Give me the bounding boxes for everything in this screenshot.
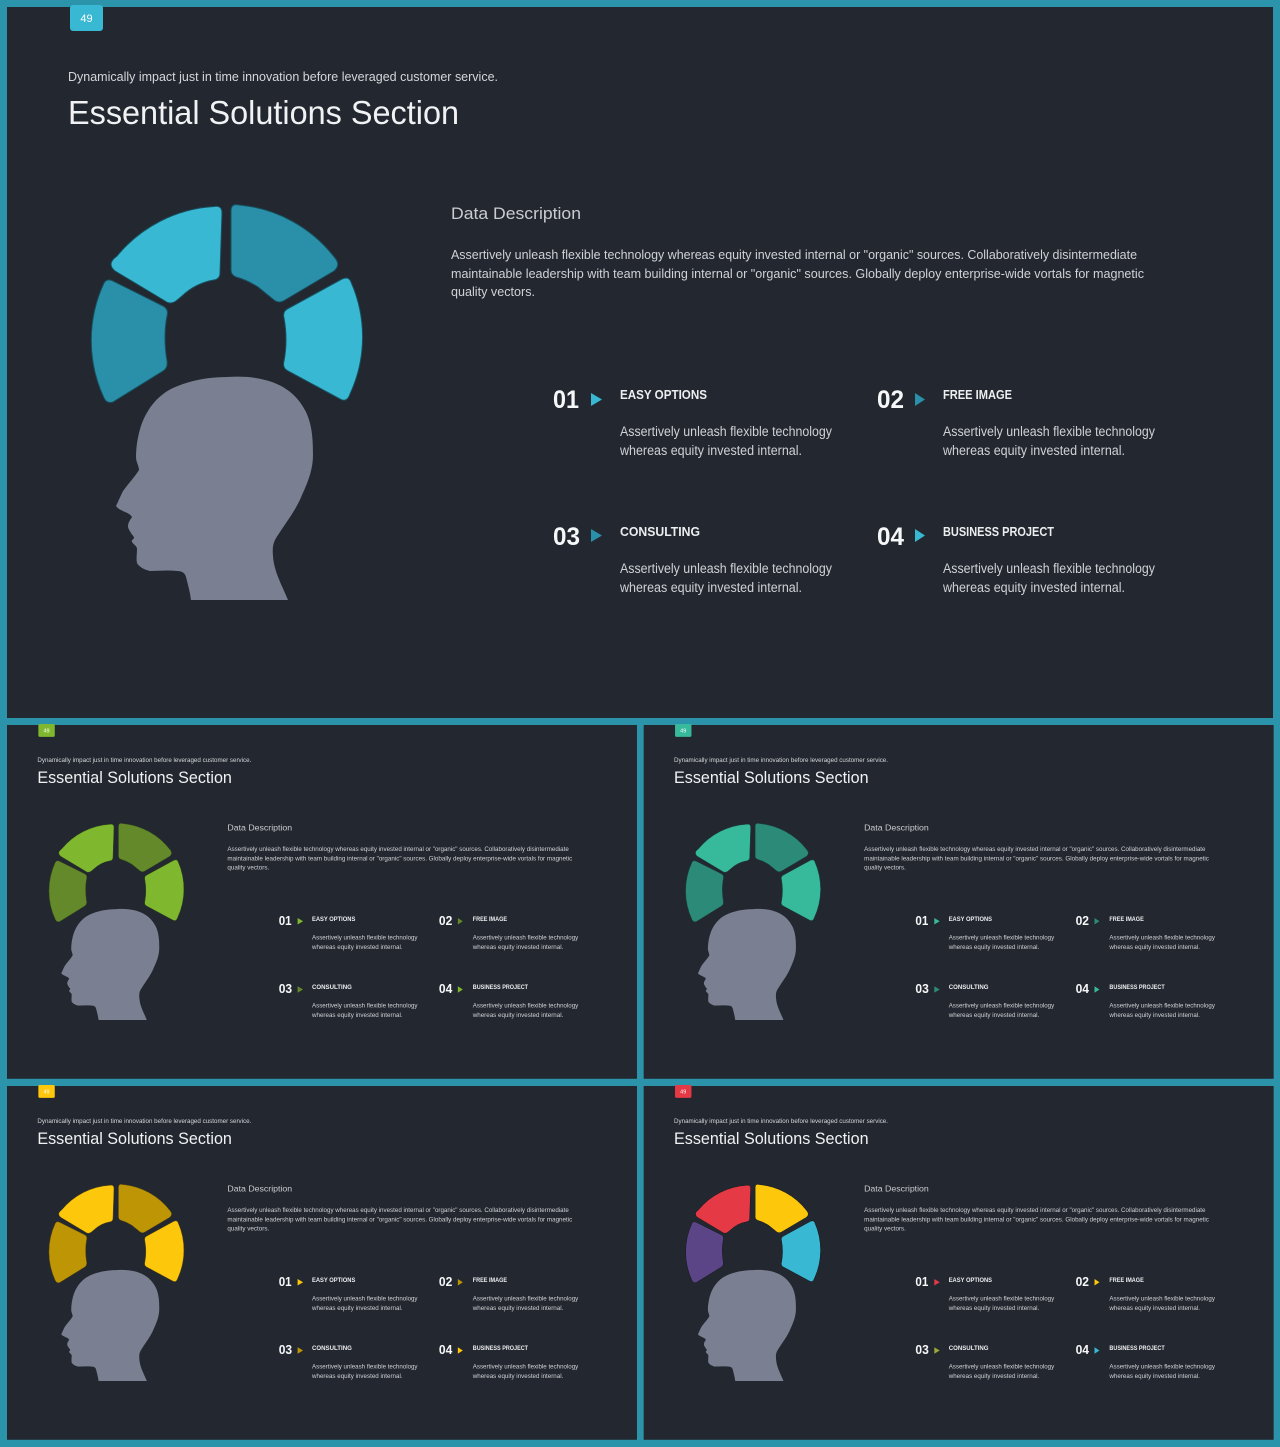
item 04: BUSINESS PROJECT: [473, 984, 528, 991]
subtitle: Dynamically impact just in time innovation before leveraged customer service.: [68, 69, 498, 84]
item 03: Assertively unleash flexible technology: [949, 1003, 1055, 1010]
item 03: 03: [553, 523, 580, 551]
item 03: whereas equity invested internal.: [948, 1373, 1039, 1380]
item 01: EASY OPTIONS: [949, 1277, 993, 1284]
item 01: 01: [279, 914, 292, 928]
text block: description: quality vectors.: [227, 1225, 269, 1232]
item 04: BUSINESS PROJECT: [943, 524, 1054, 539]
item 01: EASY OPTIONS: [949, 916, 993, 923]
item 02: [877, 386, 1155, 458]
text block: description: maintainable leadership with team building internal or "organic" sources. Globally deploy enterprise-wide vortals for magnetic: [864, 855, 1210, 862]
item 04: whereas equity invested internal.: [1109, 1373, 1200, 1380]
item 04: BUSINESS PROJECT: [1109, 1345, 1165, 1352]
item 01: Assertively unleash flexible technology: [312, 934, 418, 941]
title: Essential Solutions Section: [674, 769, 869, 787]
badge: page number: 49: [80, 13, 93, 25]
item 02: Assertively unleash flexible technology: [473, 1295, 579, 1302]
item 03: 03: [279, 1343, 292, 1357]
item 03: Assertively unleash flexible technology: [312, 1364, 418, 1371]
badge: page number: [675, 724, 691, 737]
item 04: Assertively unleash flexible technology: [473, 1003, 579, 1010]
item 04: 04: [439, 1343, 452, 1357]
heading: data description: Data Description: [227, 1183, 292, 1193]
item 02: 02: [1076, 914, 1089, 928]
badge: page number: 49: [44, 1089, 50, 1095]
item 01: whereas equity invested internal.: [948, 944, 1039, 951]
badge: page number: 49: [44, 728, 50, 734]
item 01: 01: [279, 1275, 292, 1289]
item 03: CONSULTING: [312, 1345, 352, 1352]
title: Essential Solutions Section: [68, 94, 459, 131]
item 04: BUSINESS PROJECT: [1109, 984, 1165, 991]
text block: description: [864, 846, 1210, 871]
item 02: whereas equity invested internal.: [1109, 944, 1200, 951]
item 01: whereas equity invested internal.: [948, 1305, 1039, 1312]
item 01: EASY OPTIONS: [620, 387, 707, 402]
item 01: Assertively unleash flexible technology: [949, 1295, 1055, 1302]
item 03: Assertively unleash flexible technology: [312, 1003, 418, 1010]
item 04: Assertively unleash flexible technology: [1109, 1003, 1216, 1010]
item 02: whereas equity invested internal.: [472, 1305, 563, 1312]
item 03: [553, 523, 832, 595]
item 04: [1076, 1343, 1216, 1380]
panel: green-teal slide: [644, 724, 1274, 1079]
icon: head with four segments: [49, 1184, 184, 1381]
text block: description: [451, 247, 1144, 299]
item 03: whereas equity invested internal.: [948, 1012, 1039, 1019]
item 03: CONSULTING: [620, 524, 700, 539]
icon: head with four segments: [686, 823, 821, 1020]
item 03: CONSULTING: [312, 984, 352, 991]
item 01: Assertively unleash flexible technology: [620, 424, 832, 439]
item 02: FREE IMAGE: [943, 387, 1012, 402]
item 02: FREE IMAGE: [1109, 916, 1144, 923]
item 02: Assertively unleash flexible technology: [1109, 934, 1216, 941]
item 03: [279, 1343, 418, 1380]
text block: description: maintainable leadership with team building internal or "organic" sources. Globally deploy enterprise-wide vortals for magnetic: [451, 266, 1144, 281]
text block: description: quality vectors.: [864, 1225, 906, 1232]
text block: description: [227, 1207, 573, 1232]
item 01: [279, 914, 418, 951]
item 02: [439, 914, 579, 951]
subtitle: Dynamically impact just in time innovation before leveraged customer service.: [674, 757, 888, 764]
item 04: Assertively unleash flexible technology: [1109, 1364, 1216, 1371]
item 01: EASY OPTIONS: [312, 916, 356, 923]
panel: main teal slide: [7, 5, 1273, 718]
text block: description: Assertively unleash flexible technology whereas equity invested internal or "organic" sources. Collaboratively disintermediate: [864, 1207, 1206, 1214]
heading: data description: Data Description: [451, 204, 581, 223]
item 01: EASY OPTIONS: [312, 1277, 356, 1284]
icon: head with four segments: [91, 205, 363, 600]
item 04: Assertively unleash flexible technology: [473, 1364, 579, 1371]
item 04: Assertively unleash flexible technology: [943, 561, 1155, 576]
title: Essential Solutions Section: [674, 1130, 869, 1148]
badge: page number: [38, 1085, 55, 1098]
item 02: 02: [439, 914, 452, 928]
item 01: [553, 386, 832, 458]
text block: description: Assertively unleash flexible technology whereas equity invested internal or "organic" sources. Collaboratively disintermediate: [451, 247, 1137, 262]
icon: head with four segments: [686, 1184, 821, 1381]
item 03: 03: [279, 982, 292, 996]
item 04: BUSINESS PROJECT: [473, 1345, 528, 1352]
item 02: [1076, 1275, 1216, 1312]
item 02: 02: [439, 1275, 452, 1289]
item 02: Assertively unleash flexible technology: [1109, 1295, 1216, 1302]
item 02: Assertively unleash flexible technology: [943, 424, 1155, 439]
panel: yellow slide: [7, 1085, 637, 1440]
badge: page number: [675, 1085, 691, 1098]
item 01: whereas equity invested internal.: [311, 944, 403, 951]
badge: page number: 49: [680, 1089, 686, 1095]
badge: page number: [38, 724, 55, 737]
text block: description: Assertively unleash flexible technology whereas equity invested internal or "organic" sources. Collaboratively disintermediate: [227, 846, 569, 853]
item 04: 04: [877, 523, 904, 551]
text block: description: Assertively unleash flexible technology whereas equity invested internal or "organic" sources. Collaboratively disintermediate: [227, 1207, 569, 1214]
panel: multicolour slide: [644, 1085, 1274, 1440]
title: Essential Solutions Section: [37, 1130, 232, 1148]
text block: description: maintainable leadership with team building internal or "organic" sources. Globally deploy enterprise-wide vortals for magnetic: [227, 1216, 573, 1223]
item 04: [877, 523, 1155, 595]
subtitle: Dynamically impact just in time innovation before leveraged customer service.: [674, 1118, 888, 1125]
subtitle: Dynamically impact just in time innovation before leveraged customer service.: [37, 1118, 252, 1125]
item 03: Assertively unleash flexible technology: [949, 1364, 1055, 1371]
item 03: 03: [915, 1343, 929, 1357]
text block: description: quality vectors.: [451, 284, 535, 299]
item 02: whereas equity invested internal.: [942, 443, 1125, 458]
item 01: 01: [915, 914, 928, 928]
item 03: CONSULTING: [949, 984, 989, 991]
heading: data description: Data Description: [864, 822, 929, 832]
icon: head with four segments: [49, 823, 184, 1020]
item 04: whereas equity invested internal.: [472, 1012, 563, 1019]
item 04: [439, 982, 579, 1019]
text block: description: quality vectors.: [227, 864, 269, 871]
heading: data description: Data Description: [864, 1183, 929, 1193]
item 04: 04: [439, 982, 452, 996]
item 02: 02: [1076, 1275, 1089, 1289]
text block: description: maintainable leadership with team building internal or "organic" sources. Globally deploy enterprise-wide vortals for magnetic: [227, 855, 573, 862]
item 04: 04: [1076, 1343, 1089, 1357]
item 02: [439, 1275, 579, 1312]
badge: page number: 49: [680, 728, 686, 734]
item 03: Assertively unleash flexible technology: [620, 561, 832, 576]
text block: description: Assertively unleash flexible technology whereas equity invested internal or "organic" sources. Collaboratively disintermediate: [864, 846, 1206, 853]
item 02: FREE IMAGE: [473, 916, 508, 923]
heading: data description: Data Description: [227, 822, 292, 832]
text block: description: maintainable leadership with team building internal or "organic" sources. Globally deploy enterprise-wide vortals for magnetic: [864, 1216, 1210, 1223]
item 04: whereas equity invested internal.: [1109, 1012, 1200, 1019]
item 04: [439, 1343, 579, 1380]
item 04: whereas equity invested internal.: [942, 580, 1125, 595]
item 04: whereas equity invested internal.: [472, 1373, 563, 1380]
item 01: whereas equity invested internal.: [311, 1305, 403, 1312]
item 02: FREE IMAGE: [473, 1277, 508, 1284]
item 01: [915, 1275, 1055, 1312]
item 03: [915, 982, 1055, 1019]
subtitle: Dynamically impact just in time innovation before leveraged customer service.: [37, 757, 252, 764]
text block: description: [864, 1207, 1210, 1232]
title: Essential Solutions Section: [37, 769, 232, 787]
text block: description: quality vectors.: [864, 864, 906, 871]
item 03: whereas equity invested internal.: [311, 1373, 403, 1380]
item 01: 01: [553, 386, 579, 414]
item 02: whereas equity invested internal.: [1109, 1305, 1200, 1312]
item 01: [915, 914, 1055, 951]
item 02: Assertively unleash flexible technology: [473, 934, 579, 941]
panel: green slide: [7, 724, 637, 1079]
text block: description: [227, 846, 573, 871]
item 01: Assertively unleash flexible technology: [949, 934, 1055, 941]
item 01: 01: [915, 1275, 928, 1289]
item 02: whereas equity invested internal.: [472, 944, 563, 951]
item 03: whereas equity invested internal.: [619, 580, 802, 595]
item 04: [1076, 982, 1216, 1019]
badge: page number: [70, 5, 103, 31]
item 02: 02: [877, 386, 904, 414]
item 03: [279, 982, 418, 1019]
item 01: Assertively unleash flexible technology: [312, 1295, 418, 1302]
item 03: 03: [915, 982, 929, 996]
item 03: CONSULTING: [949, 1345, 989, 1352]
item 03: [915, 1343, 1055, 1380]
item 03: whereas equity invested internal.: [311, 1012, 403, 1019]
item 02: FREE IMAGE: [1109, 1277, 1144, 1284]
item 02: [1076, 914, 1216, 951]
item 04: 04: [1076, 982, 1089, 996]
item 01: [279, 1275, 418, 1312]
item 01: whereas equity invested internal.: [619, 443, 802, 458]
